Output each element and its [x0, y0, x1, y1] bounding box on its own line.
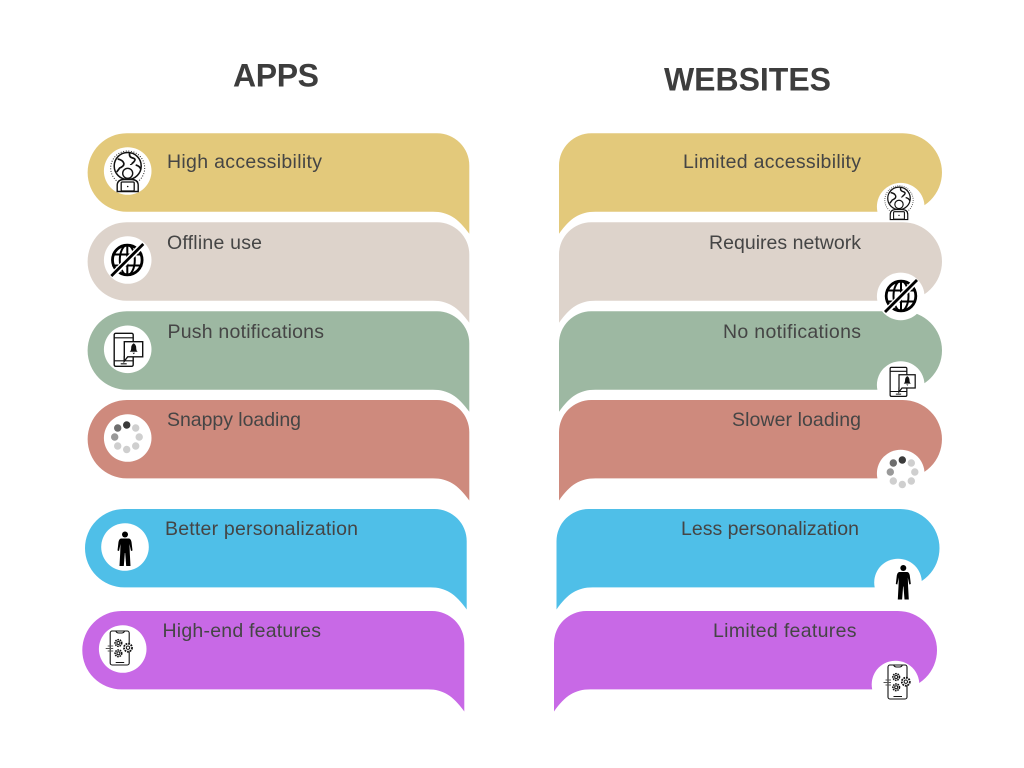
apps row: high-end features: [82, 611, 464, 712]
panel: websites column: [554, 133, 942, 712]
apps row: better personalization: Better personalization: [165, 518, 358, 540]
websites row: requires network: Requires network: [709, 232, 861, 254]
apps row: high accessibility: High accessibility: [167, 151, 322, 173]
panel: apps column: [82, 133, 469, 712]
websites row: limited features: Limited features: [713, 620, 857, 642]
apps row: high-end features: High-end features: [162, 620, 321, 642]
websites row: slower loading: Slower loading: [732, 409, 861, 431]
apps row: push notifications: Push notifications: [168, 321, 324, 343]
apps row: snappy loading: Snappy loading: [167, 409, 301, 431]
apps row: offline use: Offline use: [167, 232, 262, 254]
title: websites: WEBSITES: [664, 62, 831, 98]
apps row: push notifications: [88, 311, 469, 412]
apps row: better personalization: [85, 509, 467, 610]
websites row: requires network: [559, 222, 942, 323]
apps row: high accessibility: [88, 133, 469, 234]
websites row: limited features: [554, 611, 937, 712]
title: apps: APPS: [233, 58, 319, 94]
websites row: limited accessibility: [559, 133, 942, 234]
websites row: less personalization: Less personalization: [681, 518, 859, 540]
websites row: limited accessibility: Limited accessibility: [683, 151, 861, 173]
websites row: no notifications icon and label: [723, 321, 924, 409]
websites row: slower loading: [559, 400, 942, 500]
apps row: offline use: [88, 222, 469, 323]
apps row: snappy loading: [88, 400, 469, 500]
websites row: no notifications icon and label: No notifications: [723, 321, 861, 343]
websites row: no notifications bubble: [559, 311, 942, 412]
websites row: less personalization: [556, 509, 940, 610]
